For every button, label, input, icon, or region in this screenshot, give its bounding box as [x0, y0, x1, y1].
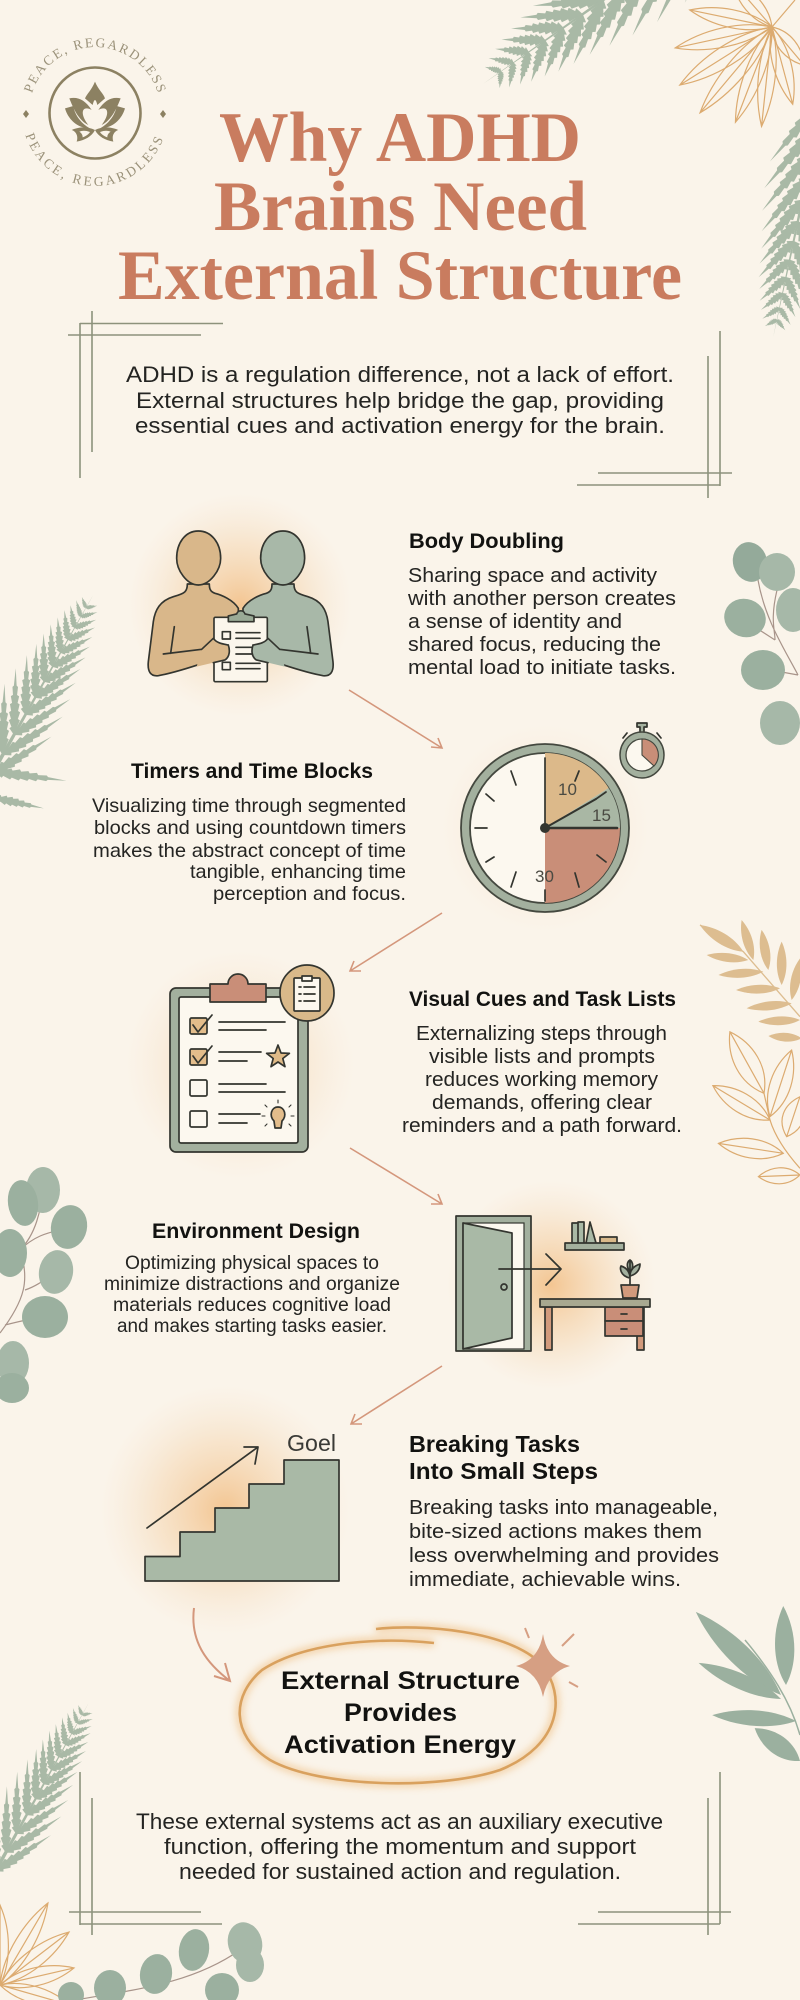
icon: clipboard checklist	[125, 950, 355, 1180]
section text: Breaking Tasks Into Small Steps: less overwhelming and provides	[409, 1544, 719, 1567]
section text: Visual Cues and Task Lists: Externalizing steps through	[416, 1022, 667, 1045]
section text: Breaking Tasks Into Small Steps: Into Small Steps	[409, 1458, 598, 1484]
foliage: right tan leaves	[697, 919, 800, 1043]
clock labels: 15	[592, 806, 611, 825]
section text: Body Doubling	[407, 530, 676, 679]
clock labels	[535, 780, 611, 886]
foliage: left eucalyptus	[0, 1167, 91, 1403]
section text: Body Doubling: Body Doubling	[409, 530, 564, 553]
section text: Timers and Time Blocks: tangible, enhancing time	[190, 861, 406, 883]
title: Brains Need	[214, 168, 587, 246]
section text: Environment Design: and makes starting tasks easier.	[117, 1316, 387, 1337]
intro text: External structures help bridge the gap, providing	[136, 388, 664, 413]
callout text	[281, 1667, 520, 1759]
logo text arcs	[24, 38, 166, 186]
foliage: bottom right leaves	[688, 1604, 800, 1769]
section text: Visual Cues and Task Lists: reduces working memory	[425, 1068, 659, 1091]
callout text: Provides	[344, 1699, 457, 1727]
icon: door and desk	[446, 1180, 656, 1390]
section text: Visual Cues and Task Lists: reminders and a path forward.	[402, 1114, 682, 1137]
foliage: bottom eucalyptus	[58, 1918, 267, 2000]
foliage: bottom left outline leaves	[0, 1898, 76, 2000]
section text: Timers and Time Blocks: makes the abstract concept of time	[93, 840, 406, 862]
arrow: 3	[350, 1148, 442, 1204]
door arrow	[499, 1254, 561, 1285]
title: Why ADHD	[219, 99, 581, 177]
section text: Visual Cues and Task Lists: demands, offering clear	[432, 1091, 652, 1114]
section text: Environment Design: materials reduces cognitive load	[113, 1295, 391, 1316]
section text: Environment Design: minimize distractions and organize	[104, 1274, 400, 1295]
oval stroke	[240, 1627, 556, 1783]
foliage: top right fern	[451, 0, 792, 130]
foliage: right fern	[729, 60, 800, 347]
section text: Timers and Time Blocks: Timers and Time Blocks	[131, 760, 373, 783]
lightbulb	[262, 1100, 294, 1128]
callout text: Activation Energy	[284, 1731, 516, 1759]
intro text	[126, 362, 674, 438]
callout: activation energy	[240, 1627, 578, 1783]
callout text: External Structure	[281, 1667, 520, 1695]
badge	[280, 965, 334, 1021]
rising arrow	[147, 1447, 258, 1528]
section text: Visual Cues and Task Lists	[402, 988, 682, 1137]
section text: Environment Design: Environment Design	[152, 1220, 360, 1243]
clipboard	[214, 611, 267, 682]
arrow: 1	[349, 690, 442, 748]
arrow: 2	[350, 913, 442, 971]
clock labels: 10	[558, 780, 577, 799]
icon: stopwatch	[620, 723, 664, 778]
closing text: function, offering the momentum and support	[164, 1834, 636, 1859]
icon: clock	[440, 723, 650, 933]
intro text: ADHD is a regulation difference, not a lack of effort.	[126, 362, 674, 387]
section text: Breaking Tasks Into Small Steps: bite-sized actions makes them	[409, 1520, 702, 1543]
section text: Body Doubling: shared focus, reducing the	[408, 633, 661, 656]
section text: Visual Cues and Task Lists: visible lists and prompts	[429, 1045, 655, 1068]
section text: Body Doubling: Sharing space and activity	[408, 564, 658, 587]
clock sectors	[545, 753, 620, 903]
clipboard board	[170, 988, 308, 1152]
clock labels: 30	[535, 867, 554, 886]
section text: Environment Design: Optimizing physical spaces to	[125, 1253, 379, 1274]
section text: Breaking Tasks Into Small Steps: immediate, achievable wins.	[409, 1568, 681, 1591]
logo text arcs: PEACE, REGARDLESS	[24, 38, 166, 93]
section text: Body Doubling: mental load to initiate tasks.	[408, 656, 676, 679]
logo diamonds	[23, 110, 166, 118]
frame: intro corners	[68, 311, 732, 498]
plant	[621, 1260, 640, 1298]
logo: Peace, Regardless	[23, 38, 166, 186]
section text: Body Doubling: with another person creates	[407, 587, 676, 610]
intro text: essential cues and activation energy for the brain.	[135, 413, 665, 438]
door	[456, 1216, 531, 1351]
oval glow	[240, 1627, 556, 1783]
goal label: Goel	[287, 1430, 336, 1456]
section text: Breaking Tasks Into Small Steps	[409, 1431, 719, 1591]
title	[118, 99, 682, 315]
hands	[163, 627, 318, 667]
foliage: right eucalyptus	[719, 538, 800, 745]
section text: Body Doubling: a sense of identity and	[408, 610, 622, 633]
closing text	[136, 1809, 663, 1884]
section text: Visual Cues and Task Lists: Visual Cues and Task Lists	[409, 988, 676, 1011]
right person	[243, 531, 333, 676]
foliage: left fern	[0, 576, 127, 814]
title: External Structure	[118, 237, 682, 315]
foliage: top right outline palm	[673, 0, 800, 127]
foliage: bottom left fern	[0, 1685, 120, 1907]
section text: Breaking Tasks Into Small Steps: Breaking Tasks	[409, 1431, 580, 1457]
arrow: curved to callout	[193, 1608, 230, 1681]
clock ticks and hands	[475, 758, 617, 901]
foliage: right outline leaves	[708, 1026, 800, 1185]
arrow: 4	[351, 1366, 442, 1424]
clipboard clip	[210, 974, 266, 1002]
icon: stairs to goal	[100, 1385, 350, 1635]
section text: Timers and Time Blocks: Visualizing time through segmented	[92, 795, 406, 817]
closing text: These external systems act as an auxiliary executive	[136, 1809, 663, 1834]
desk	[540, 1299, 650, 1350]
section text: Timers and Time Blocks: blocks and using countdown timers	[94, 817, 406, 839]
logo lotus	[65, 82, 125, 142]
logo ring	[50, 68, 140, 158]
icon: body doubling	[128, 493, 352, 717]
stairs	[145, 1460, 339, 1581]
section text: Environment Design	[104, 1220, 400, 1337]
closing text: needed for sustained action and regulation.	[179, 1859, 621, 1884]
section text: Timers and Time Blocks: perception and focus.	[213, 883, 406, 905]
sparkle	[516, 1628, 578, 1697]
shelf	[565, 1222, 624, 1250]
left person	[148, 531, 238, 676]
logo text arcs: PEACE, REGARDLESS	[26, 132, 162, 186]
star	[267, 1045, 289, 1067]
section text: Breaking Tasks Into Small Steps: Breaking tasks into manageable,	[409, 1496, 718, 1519]
checklist rows	[190, 1015, 285, 1127]
frame: closing corners	[69, 1772, 731, 1935]
section text: Timers and Time Blocks	[92, 760, 406, 905]
